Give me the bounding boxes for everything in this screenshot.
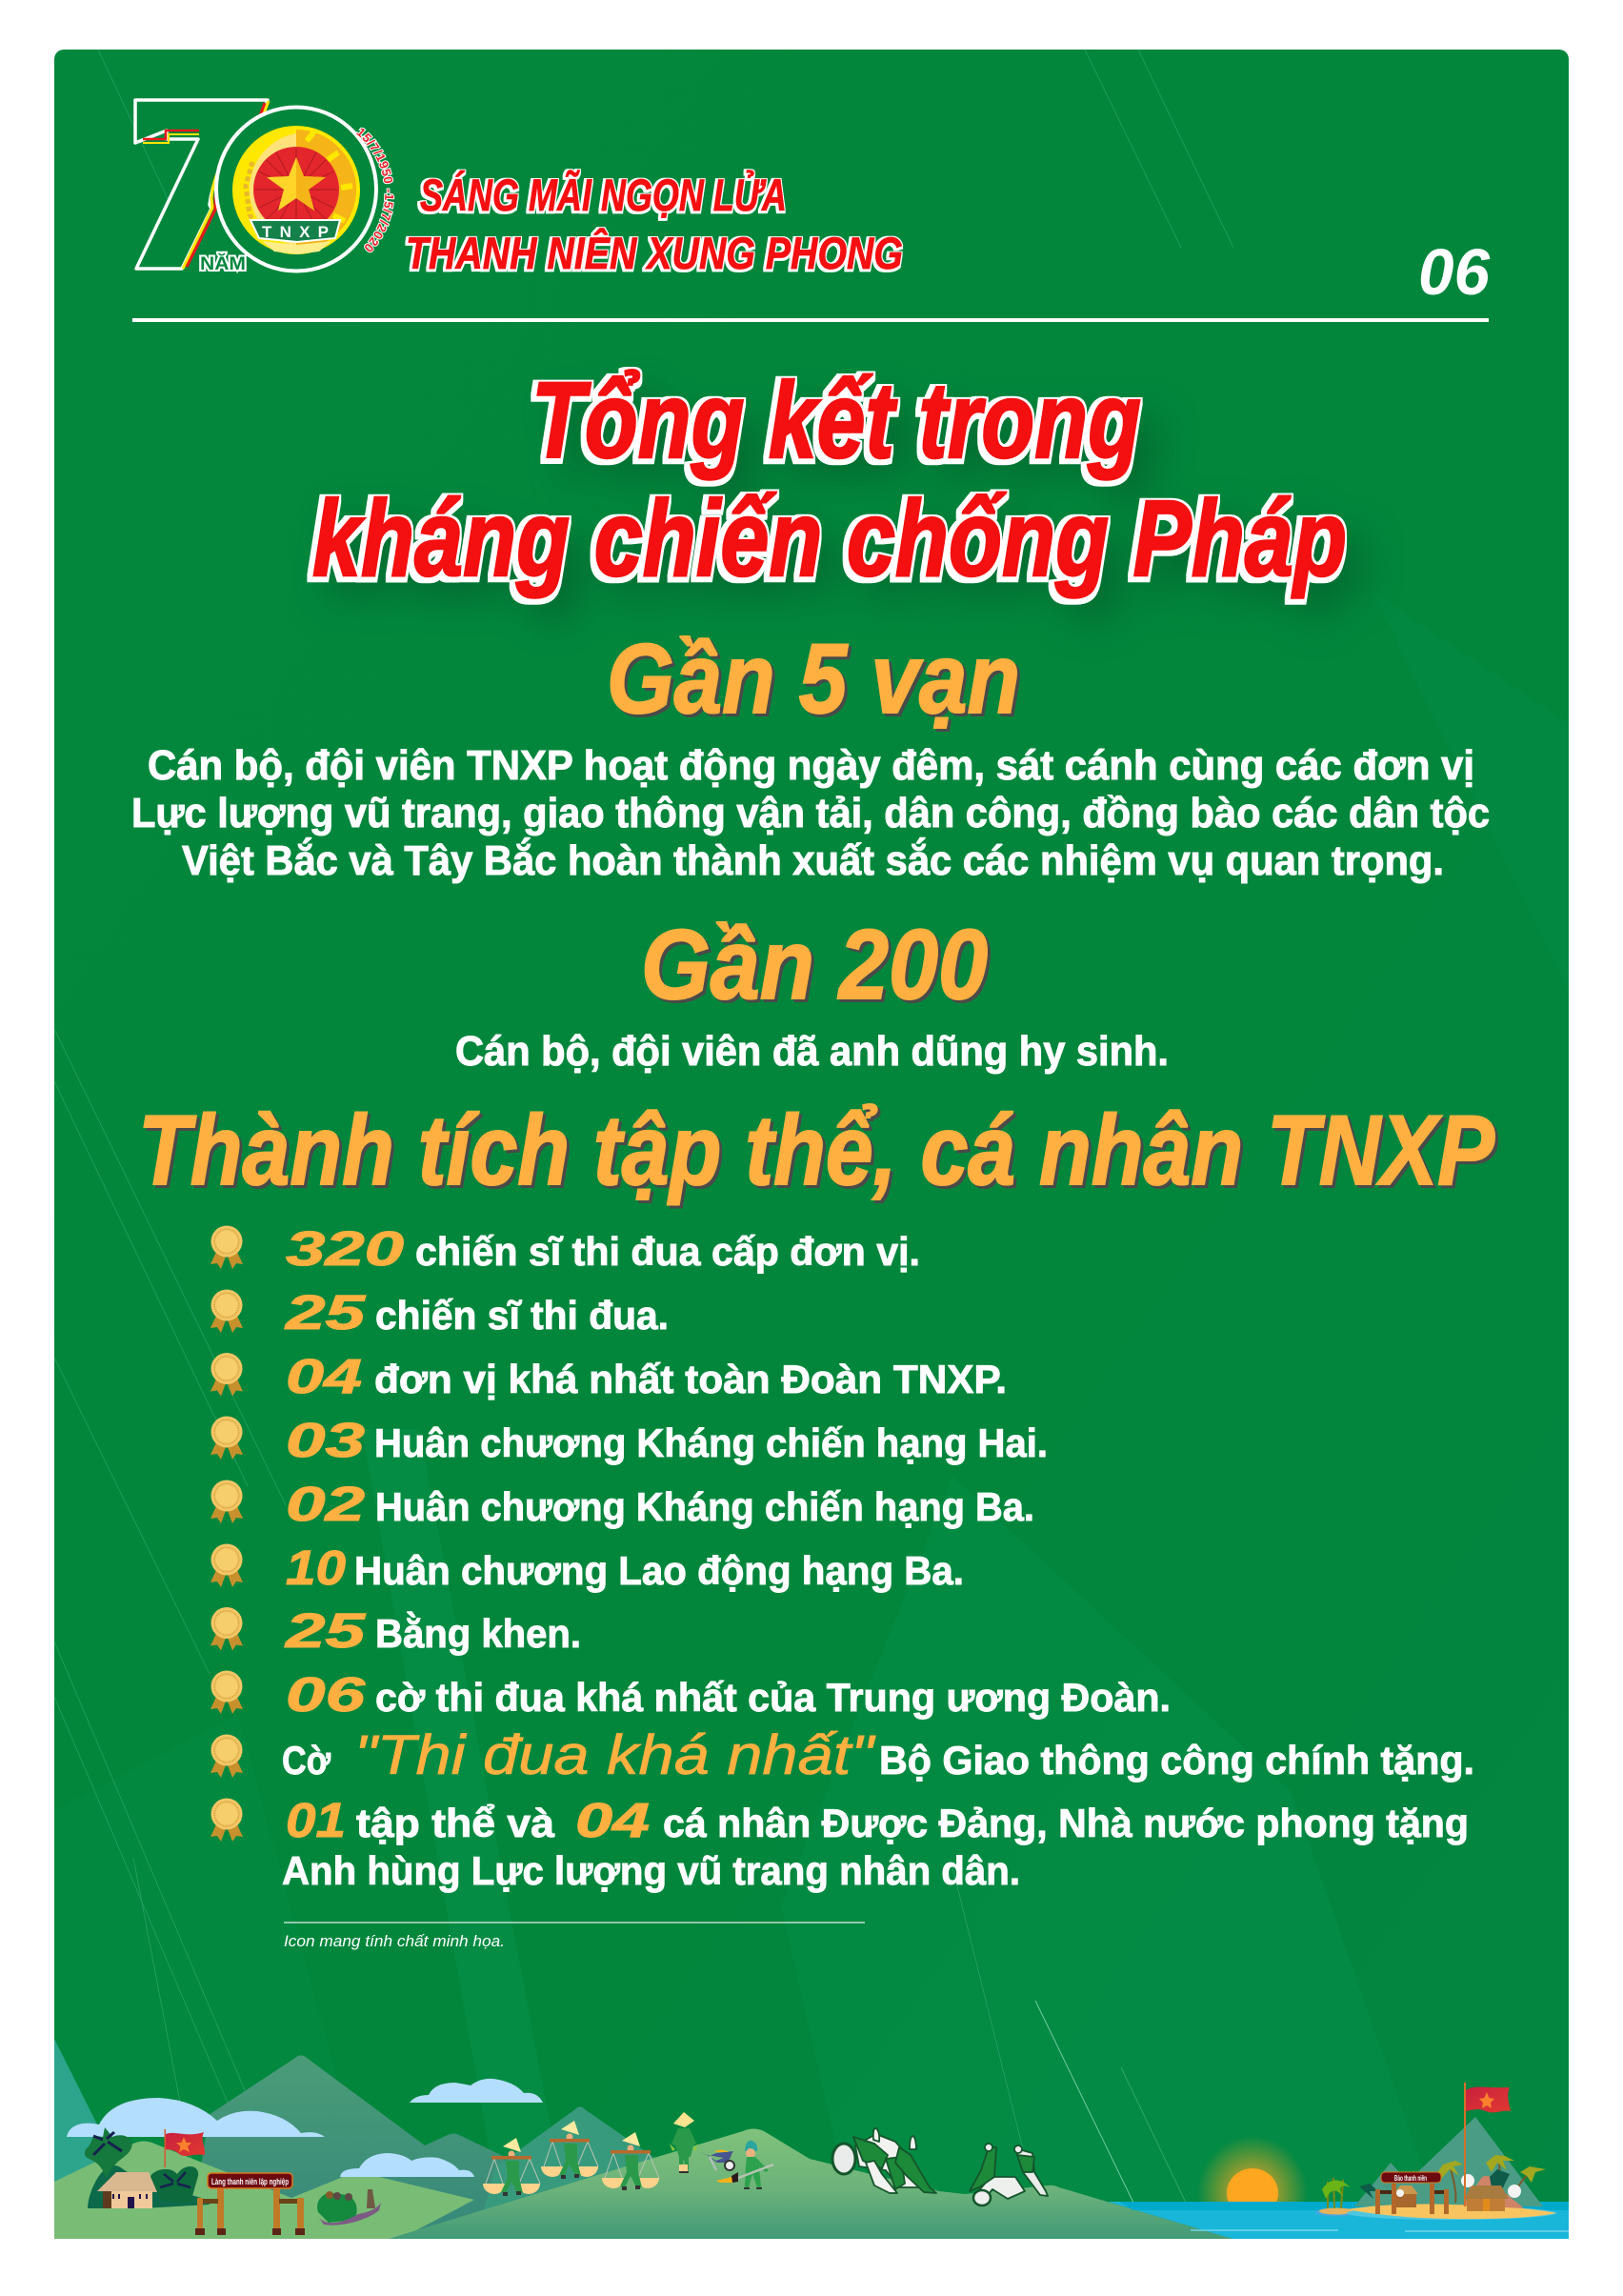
hill: light green left: [54, 2142, 474, 2239]
wheelbarrow: [696, 2149, 734, 2170]
logo ring: [216, 107, 376, 271]
list row 6: [210, 1541, 964, 1595]
mountain: back grey-green: [202, 2056, 505, 2231]
list row 5: Huân chương Kháng chiến hạng Ba.: [375, 1484, 1034, 1529]
flag: island: [1464, 2083, 1511, 2206]
list row 10: cá nhân Được Đảng, Nhà nước phong tặng: [663, 1801, 1469, 1845]
list row 4: Huân chương Kháng chiến hạng Hai.: [374, 1420, 1048, 1465]
list row 10: 04: [575, 1793, 650, 1847]
list row 9: "Thi đua khá nhất": [354, 1724, 876, 1786]
logo date text: 15/7/1950 -15/7/2020: [356, 128, 394, 253]
woman with conical hat: [670, 2112, 698, 2173]
list row 9: Bộ Giao thông công chính tặng.: [879, 1738, 1474, 1782]
logo emblem: [232, 126, 360, 254]
porter 1: [483, 2138, 540, 2196]
list row 1: 320: [286, 1221, 404, 1276]
paragraph: activities: [131, 742, 1490, 884]
list row 3: đơn vị khá nhất toàn Đoàn TNXP.: [374, 1357, 1007, 1401]
gate: youth island: [1375, 2172, 1449, 2214]
list row 1: [210, 1221, 920, 1276]
title line 1: Tổng kết trong: [531, 360, 1141, 480]
slogan: [406, 170, 903, 278]
list row 1: chiến sĩ thi đua cấp đơn vị.: [415, 1229, 920, 1274]
paragraph line 1: Cán bộ, đội viên TNXP hoạt động ngày đêm, sát cánh cùng các đơn vị: [148, 742, 1474, 789]
list row 8: cờ thi đua khá nhất của Trung ương Đoàn.: [375, 1675, 1171, 1720]
island background mountains: [1354, 2117, 1543, 2206]
list row 10: tập thể và: [356, 1801, 555, 1845]
gate sign text: Làng thanh niên lập nghiệp: [211, 2177, 289, 2187]
gate: youth village: [195, 2173, 305, 2235]
flag: left: [164, 2129, 205, 2167]
list row 9: [210, 1724, 1474, 1786]
logo label TNXP: TNXP: [262, 223, 329, 241]
list row 2: [210, 1285, 669, 1339]
trees and stilt house: [85, 2127, 210, 2208]
motorbike group 1: [832, 2128, 936, 2193]
page number: 06: [1418, 235, 1491, 309]
footnote: Icon mang tính chất minh họa.: [284, 1932, 505, 1950]
list row 4: [210, 1413, 1048, 1467]
sun glow: [1199, 2138, 1306, 2239]
list row 3: [210, 1349, 1007, 1403]
logo label NAM: NĂM: [200, 253, 246, 274]
list row 10: 01: [286, 1793, 346, 1847]
list row 8: [210, 1667, 1171, 1722]
group of people by campfire: [317, 2189, 381, 2226]
mountain: teal left: [54, 2039, 97, 2182]
list row 7: Bằng khen.: [375, 1610, 581, 1656]
list row 5: [210, 1477, 1034, 1531]
logo numeral seven: [135, 100, 269, 269]
list row 2: chiến sĩ thi đua.: [375, 1293, 669, 1338]
list row 5: 02: [286, 1477, 365, 1531]
list row 3: 04: [286, 1349, 362, 1403]
main title: [312, 360, 1347, 598]
porter 2: [541, 2121, 598, 2179]
sea: [1108, 2202, 1569, 2239]
list row 6: 10: [286, 1541, 346, 1595]
headline: Gan 5 van: Gần 5 vạn: [607, 624, 1020, 735]
list row 10 continuation: Anh hùng Lực lượng vũ trang nhân dân.: [282, 1848, 1020, 1893]
sun: [1227, 2168, 1278, 2202]
illustration: landscape: [54, 2039, 1569, 2250]
headline: Gan 200: Gần 200: [641, 910, 988, 1020]
list row 8: 06: [286, 1667, 366, 1722]
list row 4: 03: [286, 1413, 365, 1467]
paragraph line 3: Việt Bắc và Tây Bắc hoàn thành xuất sắc các nhiệm vụ quan trọng.: [182, 836, 1444, 884]
cloud: large left: [67, 2098, 325, 2137]
paragraph line 2: Lực lượng vũ trang, giao thông vận tải, dân công, đồng bào các dân tộc: [131, 790, 1490, 836]
cloud: upper middle: [410, 2079, 543, 2103]
mountain: middle teal: [484, 2107, 654, 2209]
slogan line 1: SÁNG MÃI NGỌN LỬA: [420, 170, 787, 220]
list row 7: [210, 1603, 581, 1658]
list row 10: [210, 1793, 1469, 1847]
cloud: lower middle: [340, 2153, 474, 2177]
island with huts: [1347, 2155, 1556, 2220]
title line 2: kháng chiến chống Pháp: [312, 478, 1347, 598]
list row 9: Cờ: [282, 1738, 331, 1782]
logo: 70 years emblem: [133, 98, 394, 274]
list row 6: Huân chương Lao động hạng Ba.: [354, 1548, 964, 1593]
hill: large foreground: [389, 2128, 1232, 2239]
porter 3: [602, 2132, 659, 2190]
text: fallen cadres: Cán bộ, đội viên đã anh dũng hy sinh.: [455, 1028, 1169, 1075]
list row 7: 25: [285, 1603, 366, 1658]
worker with shovel: [716, 2141, 773, 2189]
list row 2: 25: [285, 1285, 366, 1339]
motorbike group 2: [970, 2144, 1048, 2205]
slogan line 2: THANH NIÊN XUNG PHONG: [406, 228, 903, 278]
achievements list: [210, 1221, 1474, 1893]
header divider: [132, 318, 1489, 322]
gate sign text: Đảo thanh niên: [1394, 2174, 1427, 2183]
small bamboo islet: [1315, 2178, 1357, 2216]
